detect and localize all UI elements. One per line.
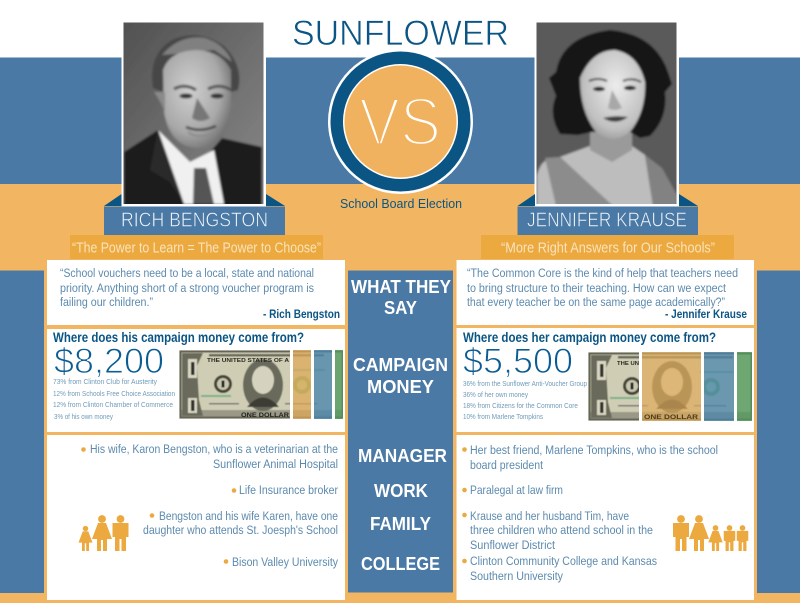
dollar bill: share bars: THE UN [617,361,639,367]
name ribbon: Jennifer Krause [518,194,698,235]
panel: Bengston campaign money: $8,200 [54,342,164,381]
panel: Krause background: board president [470,458,544,472]
panel: Bengston campaign money: 12% from Clinton Chamber of Commerce [53,400,173,409]
dollar bill: share bars: THE UNITED STATES OF A [207,358,289,364]
panel: Bengston campaign money: 3% of his own money [54,412,113,421]
panel: Krause campaign money: $5,500 [463,342,573,381]
panel: Krause background: Clinton Community College and Kansas [470,554,657,568]
center category column: FAMILY [370,514,431,534]
dollar bill: share bars [179,350,344,419]
slogan: Jennifer Krause [481,235,734,259]
dollar bill: share bars [588,352,753,421]
panel: Krause quote [456,260,754,325]
icon: family of five [673,515,748,551]
panel: Bengston campaign money: Where does his campaign money come from? [53,329,304,345]
panel: Bengston background: His wife, Karon Bengston, who is a veterinarian at the [90,442,338,456]
panel: Bengston background: Bengston and his wife Karen, have one [159,509,338,523]
panel: Bengston background: Bison Valley University [232,555,339,569]
center category column: CAMPAIGN [353,355,448,375]
dollar bill: share bars: ONE DOLLAR [644,415,699,421]
panel: Krause campaign money: 36% of her own money [463,390,528,399]
panel: Krause background: Her best friend, Marlene Tompkins, who is the school [470,443,718,457]
center category column: SAY [384,298,417,318]
slogan: Rich Bengston: “The Power to Learn = The Power to Choose” [72,240,321,256]
center category column: MANAGER [358,446,447,466]
dollar bill: share bars: ONE DOLLAR [241,413,290,419]
panel: Bengston background: daughter who attends St. Joesph's School [143,523,338,537]
slogan: Rich Bengston [70,235,323,259]
center category column: MONEY [367,377,434,397]
VS badge: VS [359,84,441,160]
panel: Bengston background: Sunflower Animal Hospital [213,457,338,471]
panel: Krause background: three children who attend school in the [470,523,653,537]
panel: Krause campaign money [456,328,754,432]
panel: Bengston campaign money [47,329,345,432]
name ribbon: Jennifer Krause: JENNIFER KRAUSE [527,210,687,232]
panel: Krause background: Southern University [470,569,564,583]
panel: Krause background: Krause and her husband Tim, have [470,509,629,523]
icon: family of three [78,515,128,551]
panel: Krause background: Sunflower District [470,538,556,552]
panel: Bengston quote: - Rich Bengston [263,307,340,321]
title: SUNFLOWER [292,14,509,53]
panel: Bengston background [47,435,345,600]
center category column: WHAT THEY [351,277,451,297]
portrait: Rich Bengston [120,20,270,210]
panel: Bengston campaign money: 73% from Clinton Club for Austerity [53,377,157,386]
panel: Bengston quote: priority. Anything short of a strong voucher program is [60,281,314,295]
center category column: WORK [374,481,428,501]
center category column: COLLEGE [361,554,440,574]
portrait: Jennifer Krause [530,20,680,210]
slogan: Jennifer Krause: “More Right Answers for Our Schools” [501,240,715,256]
panel: Krause background [456,435,754,600]
panel: Bengston campaign money: 12% from Schools Free Choice Association [53,389,175,398]
panel: Krause campaign money: 36% from the Sunflower Anti-Voucher Group [463,379,587,388]
subtitle: School Board Election [340,196,462,211]
panel: Krause quote: - Jennifer Krause [665,307,747,321]
panel: Krause quote: to bring structure to their teaching. How can we expect [467,281,727,295]
panel: Krause quote: that every teacher be on the same page academically?” [467,295,725,309]
panel: Krause campaign money: 18% from Citizens for the Common Core [463,401,578,410]
panel: Bengston quote [47,260,345,325]
panel: Bengston background: Life Insurance broker [239,483,338,497]
panel: Bengston quote: “School vouchers need to be a local, state and national [60,266,314,280]
panel: Bengston quote: failing our children.” [60,295,153,309]
panel: Krause campaign money: 10% from Marlene Tompkins [463,412,543,421]
panel: Krause background: Paralegal at law firm [470,483,563,497]
VS badge [328,49,473,194]
panel: Krause quote: “The Common Core is the kind of help that teachers need [467,266,738,280]
name ribbon: Rich Bengston [104,194,285,235]
name ribbon: Rich Bengston: RICH BENGSTON [121,210,268,232]
panel: Krause campaign money: Where does her campaign money come from? [463,329,716,345]
center category column [348,270,453,592]
